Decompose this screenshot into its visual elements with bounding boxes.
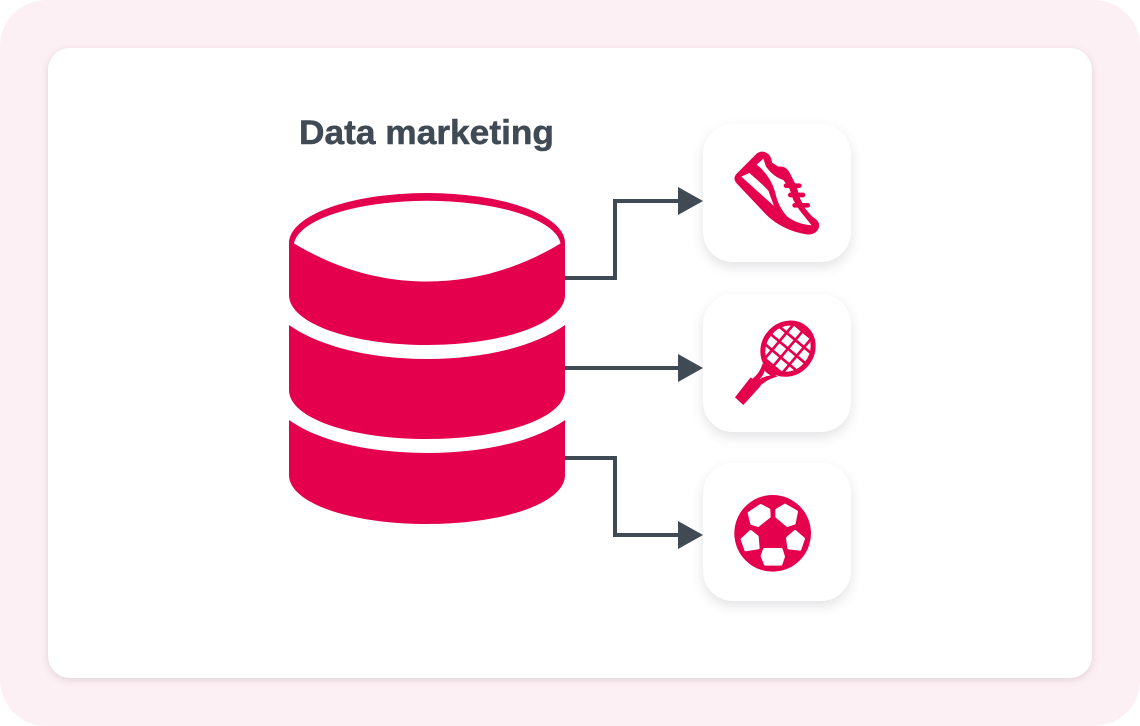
arrow: database to racket	[565, 354, 703, 382]
arrow: database to ball	[565, 458, 703, 549]
arrow: database to shoe	[565, 187, 703, 278]
database cylinder	[289, 193, 565, 524]
icon: soccer ball	[734, 495, 811, 572]
card: ball	[703, 463, 851, 601]
inner white panel	[48, 48, 1092, 678]
icon: tennis racket	[735, 320, 816, 405]
card: racket	[703, 294, 851, 432]
icon: running shoe	[734, 152, 819, 234]
card: shoe	[703, 124, 851, 262]
diagram graphics	[289, 118, 820, 572]
title: Data marketing	[299, 114, 554, 152]
